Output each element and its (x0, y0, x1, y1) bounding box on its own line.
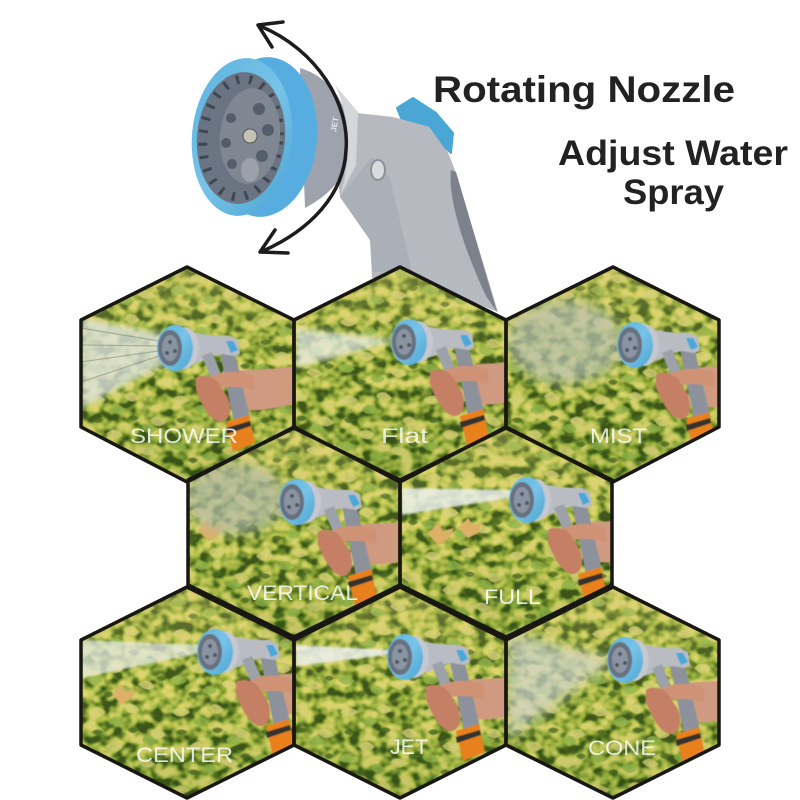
full gun (508, 476, 610, 597)
vertical gun (278, 478, 398, 606)
mist spray (507, 300, 623, 384)
hexagon: cone (508, 630, 718, 762)
lever (340, 157, 412, 272)
spray holes (221, 103, 274, 169)
full label: FULL (484, 586, 541, 609)
jet gun (386, 633, 504, 762)
shower gun (157, 325, 303, 452)
mist gun (616, 321, 718, 440)
hexagon outlines (81, 267, 719, 798)
blue ring front (185, 54, 299, 220)
cone label: CONE (588, 737, 656, 760)
center label: CENTER (136, 744, 233, 767)
hexagon: jet (296, 633, 504, 762)
shower head (241, 158, 259, 182)
blue trigger (397, 98, 453, 153)
center gun (196, 628, 292, 754)
cone gun (606, 636, 718, 762)
shower spray (81, 318, 168, 408)
flat gun (390, 318, 504, 446)
cone spray (508, 632, 615, 740)
foliage background inside hexagons (70, 260, 730, 800)
center spray (81, 640, 205, 678)
gun body and handle (330, 100, 498, 312)
flat label: Flat (381, 425, 428, 448)
hexagon: flat (296, 318, 504, 446)
collar cone (335, 85, 358, 196)
nozzle face (191, 68, 291, 208)
hexagon: shower (81, 318, 303, 452)
vertical label: VERTICAL (247, 582, 358, 605)
heading: rotating nozzle: Rotating Nozzle (433, 69, 735, 110)
hexagon: vertical (185, 462, 425, 606)
subheading: adjust water spray (558, 134, 788, 212)
main product: nozzle spray gun (185, 53, 498, 312)
mist label: MIST (590, 425, 647, 448)
double-headed rotation arrow (258, 22, 346, 253)
hexagon: mist (508, 294, 718, 443)
silver collar (300, 68, 350, 208)
full spray (402, 488, 522, 515)
nozzle disc (216, 86, 284, 186)
jet label: JET (390, 736, 428, 759)
grip inset (451, 170, 497, 312)
jet spray (296, 645, 395, 666)
subheading: adjust water spray: Spray (623, 173, 725, 212)
vertical spray (185, 462, 285, 534)
nozzle ribs (198, 76, 284, 200)
flat spray (296, 328, 398, 368)
centre screw (243, 129, 257, 143)
hexagon: full (402, 476, 610, 604)
hexagon: center (82, 628, 292, 762)
subheading: adjust water spray: Adjust Water (558, 134, 788, 173)
pivot screw (371, 160, 385, 180)
dial labels: JET (329, 116, 341, 132)
blue ring side (204, 53, 324, 221)
shower label: SHOWER (130, 425, 238, 448)
